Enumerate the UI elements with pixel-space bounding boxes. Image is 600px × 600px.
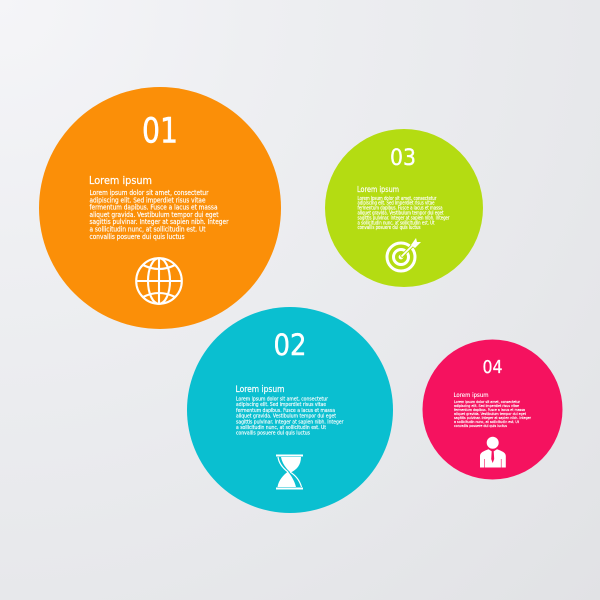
- body text: fermentum dapibus. Fusce a lacus et massa: [358, 206, 443, 212]
- number 01: 01: [142, 112, 178, 152]
- panel: 02 cyan circle: [187, 307, 393, 513]
- body text: adipiscing elit. Sed imperdiet risus vitae: [358, 201, 435, 207]
- body text: adipiscing elit. Sed imperdiet risus vitae: [90, 196, 206, 204]
- body text: Lorem ipsum dolor sit amet, consectetur: [90, 189, 209, 197]
- body text: convallis posuere dui quis luctus: [358, 225, 421, 231]
- icon: businessman: [480, 437, 506, 468]
- body text: Lorem ipsum dolor sit amet, consectetur: [454, 399, 520, 404]
- number 04: 04: [482, 357, 502, 378]
- body text: sagittis pulvinar. Integer at sapien nibh. Integer: [236, 419, 344, 425]
- body text: fermentum dapibus. Fusce a lacus et massa: [454, 407, 526, 412]
- body text: sagittis pulvinar. Integer at sapien nibh. Integer: [358, 215, 450, 221]
- body text: [358, 196, 450, 231]
- body text: fermentum dapibus. Fusce a lacus et massa: [236, 408, 335, 414]
- number 02: 02: [274, 328, 306, 362]
- heading: Lorem ipsum: Lorem ipsum: [357, 185, 399, 194]
- body text: a sollicitudin nunc, at sollicitudin est. Ut: [358, 220, 435, 226]
- number 03: 03: [390, 146, 416, 171]
- body text: [454, 399, 531, 428]
- panel: 01 orange circle: [39, 87, 281, 329]
- body text: aliquet gravida. Vestibulum tempor dui eget: [236, 414, 337, 420]
- body text: fermentum dapibus. Fusce a lacus et massa: [90, 204, 218, 212]
- body text: convallis posuere dui quis luctus: [236, 431, 310, 437]
- body text: sagittis pulvinar. Integer at sapien nibh. Integer: [454, 415, 531, 420]
- body text: a sollicitudin nunc, at sollicitudin est. Ut: [90, 226, 206, 234]
- body text: sagittis pulvinar. Integer at sapien nibh. Integer: [90, 218, 229, 226]
- panel: 04 pink circle: [422, 340, 562, 480]
- body text: adipiscing elit. Sed imperdiet risus vitae: [454, 403, 520, 408]
- body text: aliquet gravida. Vestibulum tempor dui eget: [358, 210, 444, 216]
- body text: adipiscing elit. Sed imperdiet risus vitae: [236, 402, 326, 408]
- body text: aliquet gravida. Vestibulum tempor dui eget: [454, 411, 526, 416]
- body text: convallis posuere dui quis luctus: [90, 233, 185, 241]
- icon: target with arrow: [387, 238, 421, 271]
- body text: aliquet gravida. Vestibulum tempor dui eget: [90, 211, 219, 219]
- body text: [236, 396, 344, 437]
- body text: Lorem ipsum dolor sit amet, consectetur: [358, 196, 437, 202]
- body text: a sollicitudin nunc, at sollicitudin est. Ut: [454, 419, 519, 424]
- body text: [90, 189, 229, 241]
- body text: Lorem ipsum dolor sit amet, consectetur: [236, 396, 329, 402]
- panel: 03 green circle: [325, 129, 483, 287]
- body text: convallis posuere dui quis luctus: [454, 423, 507, 428]
- icon: hourglass: [276, 454, 303, 490]
- icon: globe: [136, 258, 182, 304]
- body text: a sollicitudin nunc, at sollicitudin est. Ut: [236, 425, 327, 431]
- heading: Lorem ipsum: Lorem ipsum: [236, 385, 284, 395]
- heading: Lorem ipsum: Lorem ipsum: [89, 175, 152, 187]
- heading: Lorem ipsum: Lorem ipsum: [454, 392, 488, 399]
